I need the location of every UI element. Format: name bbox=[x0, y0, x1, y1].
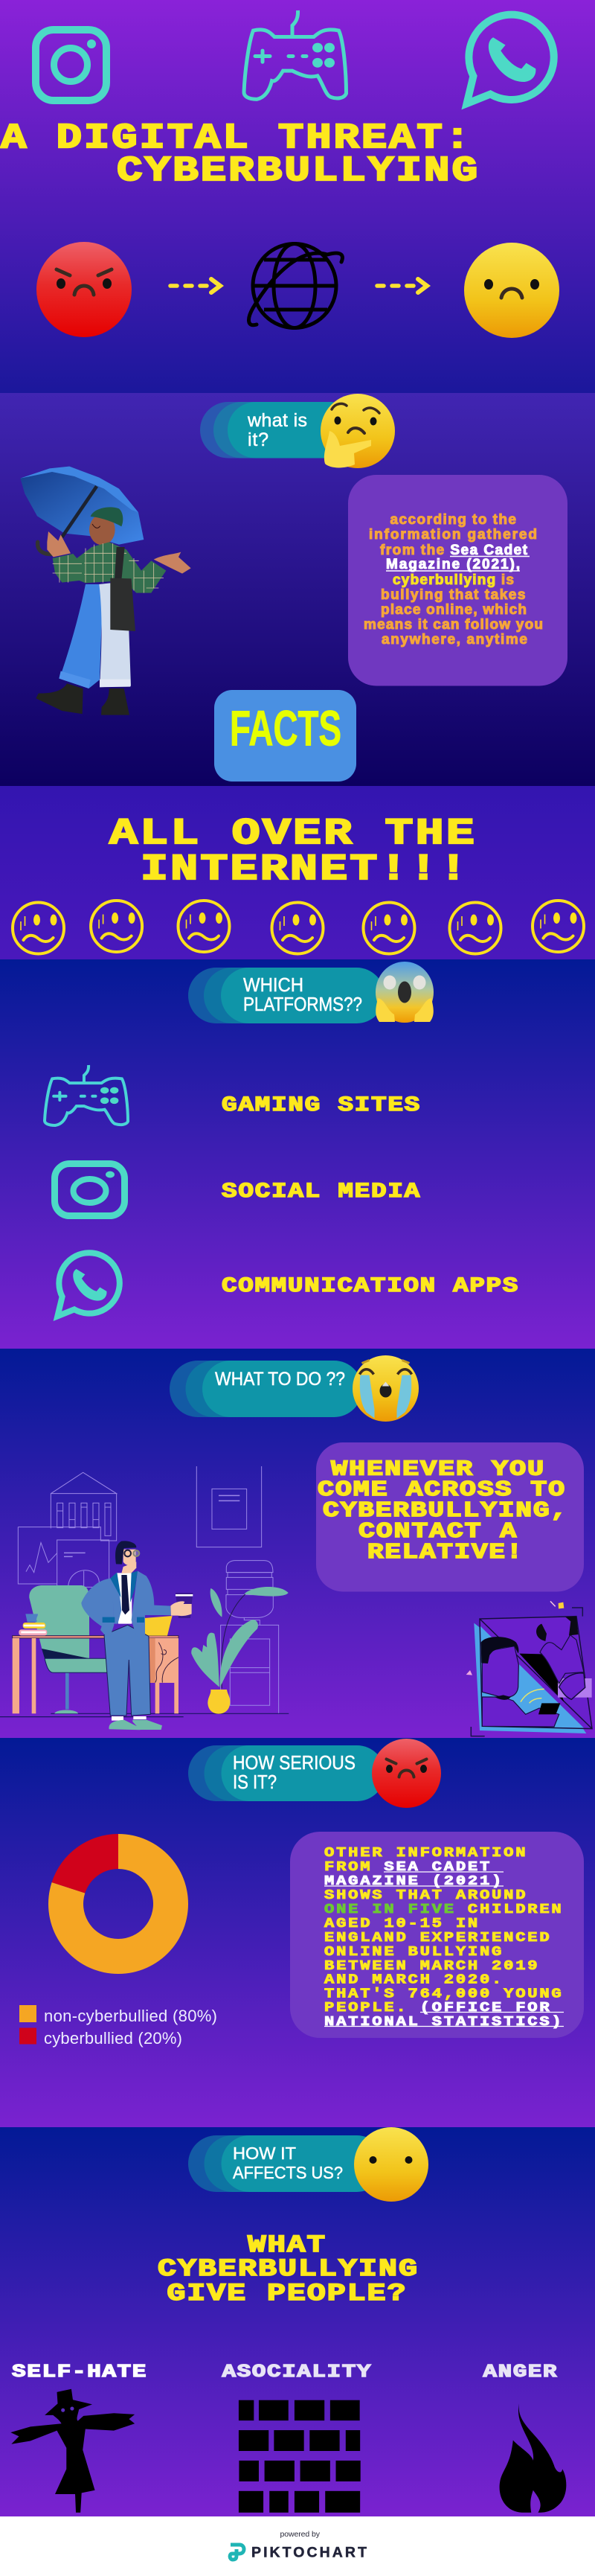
callout box: CONTACT A bbox=[358, 1519, 518, 1544]
phone bbox=[538, 1703, 560, 1714]
definition box: bullying that takes bbox=[381, 587, 525, 603]
pill heading: which platforms bbox=[188, 968, 385, 1023]
icon: instagram bbox=[55, 1164, 125, 1216]
desk bbox=[13, 1636, 178, 1713]
pill heading: what is it: what is bbox=[247, 410, 307, 431]
donut chart bbox=[48, 1834, 188, 1974]
definition box: means it can follow you bbox=[364, 617, 543, 633]
definition box: from the Sea Cadet bbox=[380, 543, 528, 558]
pill heading: how serious: HOW SERIOUS bbox=[233, 1751, 356, 1774]
facts badge: FACTS bbox=[230, 701, 341, 756]
pill heading: how it affects us bbox=[188, 2135, 385, 2192]
man bbox=[481, 1637, 559, 1727]
arrow: globe to sad bbox=[377, 279, 427, 293]
icon: globe bbox=[249, 244, 342, 327]
statistics box: PEOPLE. (OFFICE FOR bbox=[324, 2001, 551, 2016]
icon: scarecrow bbox=[10, 2389, 135, 2513]
definition box: information gathered bbox=[369, 527, 537, 543]
statistics box: AND MARCH 2020. bbox=[324, 1972, 504, 1988]
statistics box: MAGAZINE (2021) bbox=[324, 1874, 504, 1889]
icon: game controller bbox=[244, 10, 347, 99]
statistics box: SHOWS THAT AROUND bbox=[324, 1888, 527, 1903]
icon: instagram bbox=[36, 30, 106, 100]
definition box: Magazine (2021), bbox=[386, 557, 520, 572]
pill heading: what is it: it? bbox=[248, 429, 268, 450]
pill heading: how serious: IS IT? bbox=[233, 1771, 277, 1793]
emoji: screaming face bbox=[376, 962, 434, 1023]
heading: what cyberbullying give people: GIVE PEOPLE? bbox=[167, 2280, 408, 2307]
statistics box: OTHER INFORMATION bbox=[324, 1846, 527, 1861]
callout box: RELATIVE! bbox=[367, 1540, 524, 1565]
title text bbox=[1, 119, 480, 191]
woman bbox=[536, 1617, 584, 1684]
statistics box: FROM SEA CADET bbox=[324, 1860, 492, 1875]
row of worried faces bbox=[13, 901, 584, 954]
illustration: person looking at phone bbox=[466, 1601, 592, 1736]
tablet bbox=[519, 1654, 564, 1702]
worker bbox=[81, 1541, 193, 1730]
section: all over the internet bbox=[0, 786, 595, 959]
emoji: mouthless face bbox=[354, 2127, 428, 2202]
heading: what cyberbullying give people bbox=[158, 2231, 419, 2307]
legend bbox=[19, 2005, 217, 2048]
section: what to do bbox=[0, 1349, 595, 1738]
heading: what cyberbullying give people: CYBERBULLYING bbox=[158, 2255, 419, 2283]
shoes bbox=[36, 683, 129, 715]
emoji: thinking face bbox=[321, 394, 395, 468]
label: social media: SOCIAL MEDIA bbox=[222, 1180, 421, 1204]
statistics box: NATIONAL STATISTICS) bbox=[324, 2015, 563, 2030]
callout box: WHENEVER YOU bbox=[331, 1457, 545, 1481]
label: gaming sites: GAMING SITES bbox=[222, 1094, 421, 1117]
plant bbox=[191, 1587, 289, 1714]
statistics box: ONE IN FIVE CHILDREN bbox=[324, 1902, 564, 1917]
hands bbox=[47, 531, 191, 574]
section: how it affects us bbox=[0, 2127, 595, 2516]
umbrella bbox=[20, 467, 144, 554]
pill heading: what to do bbox=[170, 1361, 362, 1417]
statistics box: ENGLAND EXPERIENCED bbox=[324, 1931, 551, 1946]
head with hat bbox=[89, 507, 123, 545]
label: communication apps: COMMUNICATION APPS bbox=[222, 1275, 519, 1298]
powered by: powered by bbox=[280, 2530, 321, 2539]
pill heading: what to do: WHAT TO DO ?? bbox=[215, 1369, 345, 1390]
statistics box: AGED 10-15 IN bbox=[324, 1917, 480, 1931]
pill heading: which platforms: PLATFORMS?? bbox=[243, 993, 362, 1015]
heading: INTERNET!!! bbox=[141, 848, 469, 890]
statistics box: BETWEEN MARCH 2019 bbox=[324, 1959, 539, 1974]
icon: brick wall bbox=[239, 2400, 361, 2513]
title text: CYBERBULLYING bbox=[117, 152, 480, 191]
definition box: anywhere, anytime bbox=[382, 632, 527, 648]
outline background bbox=[18, 1466, 279, 1714]
emoji: crying face bbox=[353, 1355, 419, 1422]
arrow: angry to globe bbox=[170, 279, 220, 293]
pill heading: which platforms: WHICH bbox=[243, 974, 303, 996]
statistics box: ONLINE BULLYING bbox=[324, 1945, 504, 1960]
title text: A DIGITAL THREAT: bbox=[1, 119, 472, 159]
laptop bbox=[144, 1616, 173, 1636]
illustration: office worker bbox=[0, 1466, 289, 1730]
facts badge bbox=[214, 690, 356, 782]
icon: whatsapp bbox=[57, 1253, 120, 1316]
trousers bbox=[59, 583, 131, 688]
statistics box: THAT'S 764,000 YOUNG bbox=[324, 1987, 563, 2002]
logo mark bbox=[230, 2545, 244, 2560]
legend: cyberbullied (20%) bbox=[44, 2029, 182, 2048]
signal arcs bbox=[521, 1689, 544, 1703]
heading bbox=[109, 813, 477, 890]
section: title bbox=[0, 0, 595, 393]
callout box bbox=[316, 1442, 584, 1591]
heading: ALL OVER THE bbox=[109, 813, 477, 854]
piktochart wordmark: PIKTOCHART bbox=[251, 2545, 367, 2561]
decorations bbox=[466, 1601, 582, 1736]
emoji: angry face bbox=[372, 1739, 441, 1808]
lilac panel bbox=[558, 1678, 592, 1698]
pill heading: how serious bbox=[188, 1745, 385, 1801]
callout box: CYBERBULLYING, bbox=[323, 1498, 568, 1523]
chair bbox=[29, 1585, 109, 1713]
heading: what cyberbullying give people: WHAT bbox=[248, 2231, 327, 2259]
definition box bbox=[348, 475, 567, 686]
label: asociality: ASOCIALITY bbox=[222, 2362, 372, 2382]
definition box: cyberbullying is bbox=[393, 572, 514, 588]
icon: flame bbox=[500, 2403, 566, 2513]
illustration: person with umbrella bbox=[20, 467, 191, 715]
pill heading: what is it bbox=[200, 402, 358, 458]
statistics box bbox=[290, 1832, 584, 2038]
callout box: COME ACROSS TO bbox=[318, 1477, 566, 1502]
icon: whatsapp bbox=[467, 15, 554, 103]
pill heading: how it affects us: HOW IT bbox=[233, 2144, 296, 2163]
plaid shirt bbox=[53, 542, 166, 593]
label: anger: ANGER bbox=[483, 2362, 558, 2382]
icon: game controller bbox=[45, 1065, 128, 1125]
definition box: according to the bbox=[390, 512, 516, 528]
bag bbox=[110, 547, 135, 631]
emoji: sad face bbox=[464, 243, 559, 338]
pill heading: how it affects us: AFFECTS US? bbox=[233, 2163, 343, 2182]
section: what is it bbox=[0, 393, 595, 786]
section: which platforms bbox=[0, 959, 595, 1349]
section: how serious bbox=[0, 1738, 595, 2127]
books and cup bbox=[19, 1614, 47, 1635]
blue triangle frame bbox=[474, 1623, 586, 1733]
legend: non-cyberbullied (80%) bbox=[44, 2007, 217, 2025]
definition box: place online, which bbox=[381, 602, 527, 618]
emoji: angry face bbox=[36, 242, 132, 337]
footer bbox=[0, 2516, 595, 2576]
floor lines bbox=[0, 1713, 289, 1717]
label: self-hate: SELF-HATE bbox=[12, 2362, 147, 2382]
